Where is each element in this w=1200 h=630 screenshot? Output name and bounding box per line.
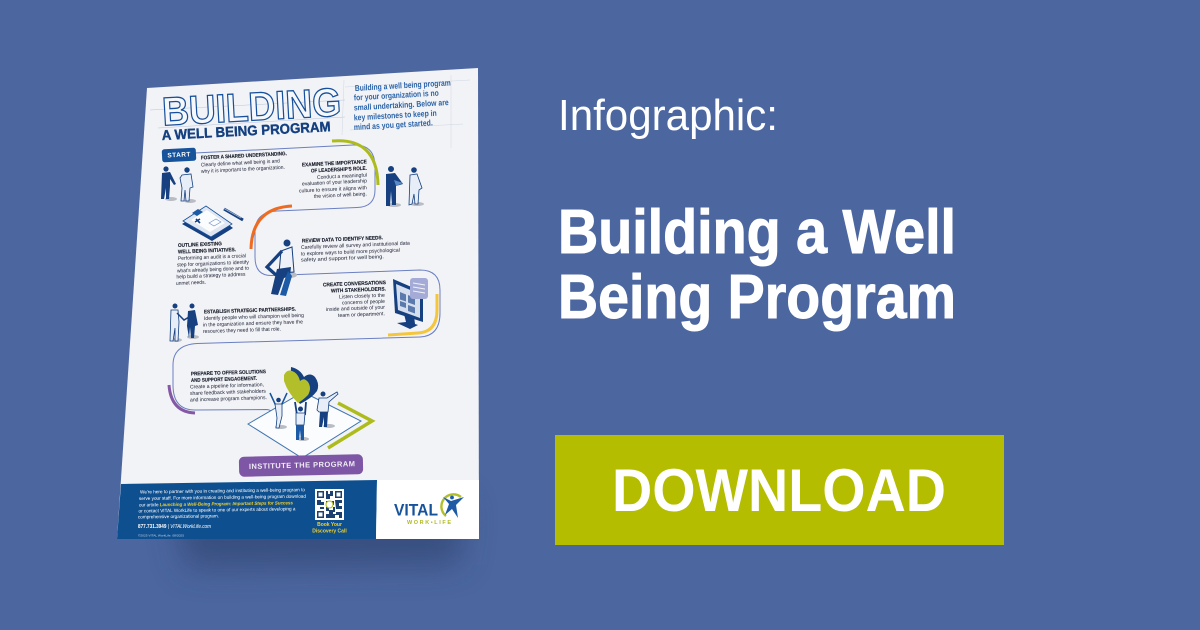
step: examine the importance of leadership's role: Conduct a meaningful (317, 173, 367, 181)
institute the program banner: INSTITUTE THE PROGRAM (249, 459, 355, 471)
step: create conversations with stakeholders: team or department. (338, 311, 385, 319)
step: prepare to offer solutions: share feedback with stakeholders (190, 389, 266, 397)
icon: two colleagues with document (386, 166, 424, 207)
step: examine the importance of leadership's role: the vision of well being. (314, 191, 367, 200)
winding path line (173, 145, 440, 413)
step: create conversations with stakeholders: Listen closely to the (339, 293, 385, 300)
step: outline existing initiatives: what's already being done and to (177, 266, 249, 274)
footer message (138, 487, 306, 519)
icon: platform diamond (248, 392, 361, 458)
QR code (315, 489, 344, 520)
step: create conversations with stakeholders: CREATE CONVERSATIONS (323, 280, 387, 288)
step: outline existing initiatives: step for organizations to identify (177, 260, 249, 268)
label: Infographic: Infographic: (558, 91, 778, 140)
step: review data to identify needs: to explore ways to build more psychological (301, 248, 400, 257)
institute the program banner (239, 454, 363, 477)
step: examine the importance of leadership's role: evaluation of your leadership (302, 178, 367, 187)
purple accent curve (169, 385, 195, 413)
step: create conversations with stakeholders: inside and outside of your (326, 305, 385, 313)
step: prepare to offer solutions: PREPARE TO OFFER SOLUTIONS (191, 369, 267, 377)
step: outline existing initiatives: WELL BEING INITIATIVES. (178, 247, 237, 255)
icon: two colleagues talking (161, 166, 196, 203)
step: outline existing initiatives: unmet needs. (176, 280, 206, 287)
footer message: serve your staff. For more information on building a well-being program download (139, 494, 306, 501)
step: create conversations with stakeholders: WITH STAKEHOLDERS. (331, 286, 387, 294)
step: establish strategic partnerships: Identify people who will champion well being (204, 313, 304, 322)
step: examine the importance of leadership's role (299, 159, 368, 200)
step: foster a shared understanding: FOSTER A SHARED UNDERSTANDING. (201, 151, 287, 161)
intro paragraph: for your organization is no (354, 88, 439, 102)
step: prepare to offer solutions: AND SUPPORT ENGAGEMENT. (191, 376, 257, 384)
step: prepare to offer solutions (190, 369, 267, 403)
step: foster a shared understanding: why it is important to the organization. (201, 165, 285, 175)
VITAL WorkLife logo (394, 494, 464, 526)
step: prepare to offer solutions: Create a pipeline for information, (190, 382, 264, 390)
poster sheet (117, 68, 479, 539)
step: prepare to offer solutions: and increase program champions. (190, 395, 267, 403)
intro paragraph: mind as you get started. (354, 117, 433, 132)
step: foster a shared understanding: Clearly define what well being is and (201, 159, 280, 168)
download button (555, 435, 1004, 545)
step: outline existing initiatives: help build a strategy to address (176, 272, 246, 280)
step: outline existing initiatives (176, 241, 249, 287)
step: review data to identify needs: Carefully review all survey and institutional data (301, 241, 410, 251)
step: outline existing initiatives: OUTLINE EXISTING (178, 241, 222, 249)
footer contact: 877.731.3949 | VITALWorkLife.com (138, 524, 211, 530)
intro paragraph (354, 77, 451, 132)
step: create conversations with stakeholders (323, 280, 387, 319)
step: create conversations with stakeholders: concerns of people (342, 299, 385, 306)
step: examine the importance of leadership's role: EXAMINE THE IMPORTANCE (302, 159, 367, 168)
step: review data to identify needs: safety and support for well being. (301, 254, 384, 263)
footer message: We're here to partner with you in creating and instituting a well-being program to (140, 487, 305, 494)
lime accent curve (332, 141, 378, 185)
QR caption: Book Your (317, 522, 342, 528)
intro paragraph: small undertaking. Below are (354, 97, 449, 112)
orange accent curve (251, 206, 292, 249)
lime chevron arrow (328, 403, 372, 448)
QR caption (312, 522, 347, 534)
footer message: our article Launching a Well-Being Program: Important Steps for Success (139, 500, 293, 507)
step: examine the importance of leadership's role: OF LEADERSHIP'S ROLE. (311, 166, 368, 174)
intro paragraph: key milestones to keep in (354, 108, 437, 122)
step: establish strategic partnerships (203, 307, 304, 335)
headline: Building a Well (558, 198, 956, 267)
start badge (162, 148, 196, 162)
footer panel (117, 480, 479, 539)
headline (558, 198, 956, 332)
footer message: or contact VITAL WorkLife to speak to one of our experts about developing a (138, 506, 296, 513)
footer message: comprehensive organizational program. (138, 513, 219, 519)
icon: handshake (170, 304, 199, 342)
yellow accent curve (388, 294, 437, 335)
icon: monitor with video call and speech bubble (393, 278, 428, 329)
headline: Being Program (558, 263, 956, 332)
icon: clipboard and pencil (182, 206, 243, 241)
intro paragraph: Building a well being program (355, 77, 451, 93)
copyright note: ©2025 VITAL WorkLife. 08/2025 (138, 534, 184, 538)
VITAL WorkLife logo: VITAL (394, 500, 438, 520)
step: establish strategic partnerships: in the organization and ensure they have the (203, 319, 303, 328)
step: foster a shared understanding (201, 151, 287, 175)
title: BUILDING outline: BUILDING (161, 81, 342, 134)
QR caption: Discovery Call (312, 528, 347, 534)
infographic poster (117, 68, 479, 539)
start badge: START (167, 151, 191, 159)
step: outline existing initiatives: Performing an audit is a crucial (178, 253, 246, 262)
step: examine the importance of leadership's role: culture to ensure it aligns with (299, 185, 367, 194)
download button: DOWNLOAD (612, 457, 946, 524)
step: review data to identify needs (301, 235, 410, 263)
VITAL WorkLife logo: WORK•LIFE (407, 520, 451, 526)
title: A Well Being Program: A WELL BEING PROGRAM (161, 118, 331, 143)
poster drop shadow (175, 500, 465, 568)
icon: team lifting heart (270, 367, 338, 441)
step: establish strategic partnerships: ESTABLISH STRATEGIC PARTNERSHIPS. (204, 307, 297, 315)
step: establish strategic partnerships: resources they need to fill that role. (203, 327, 281, 335)
icon: seated man (267, 240, 297, 296)
step: review data to identify needs: REVIEW DATA TO IDENTIFY NEEDS. (302, 235, 384, 244)
